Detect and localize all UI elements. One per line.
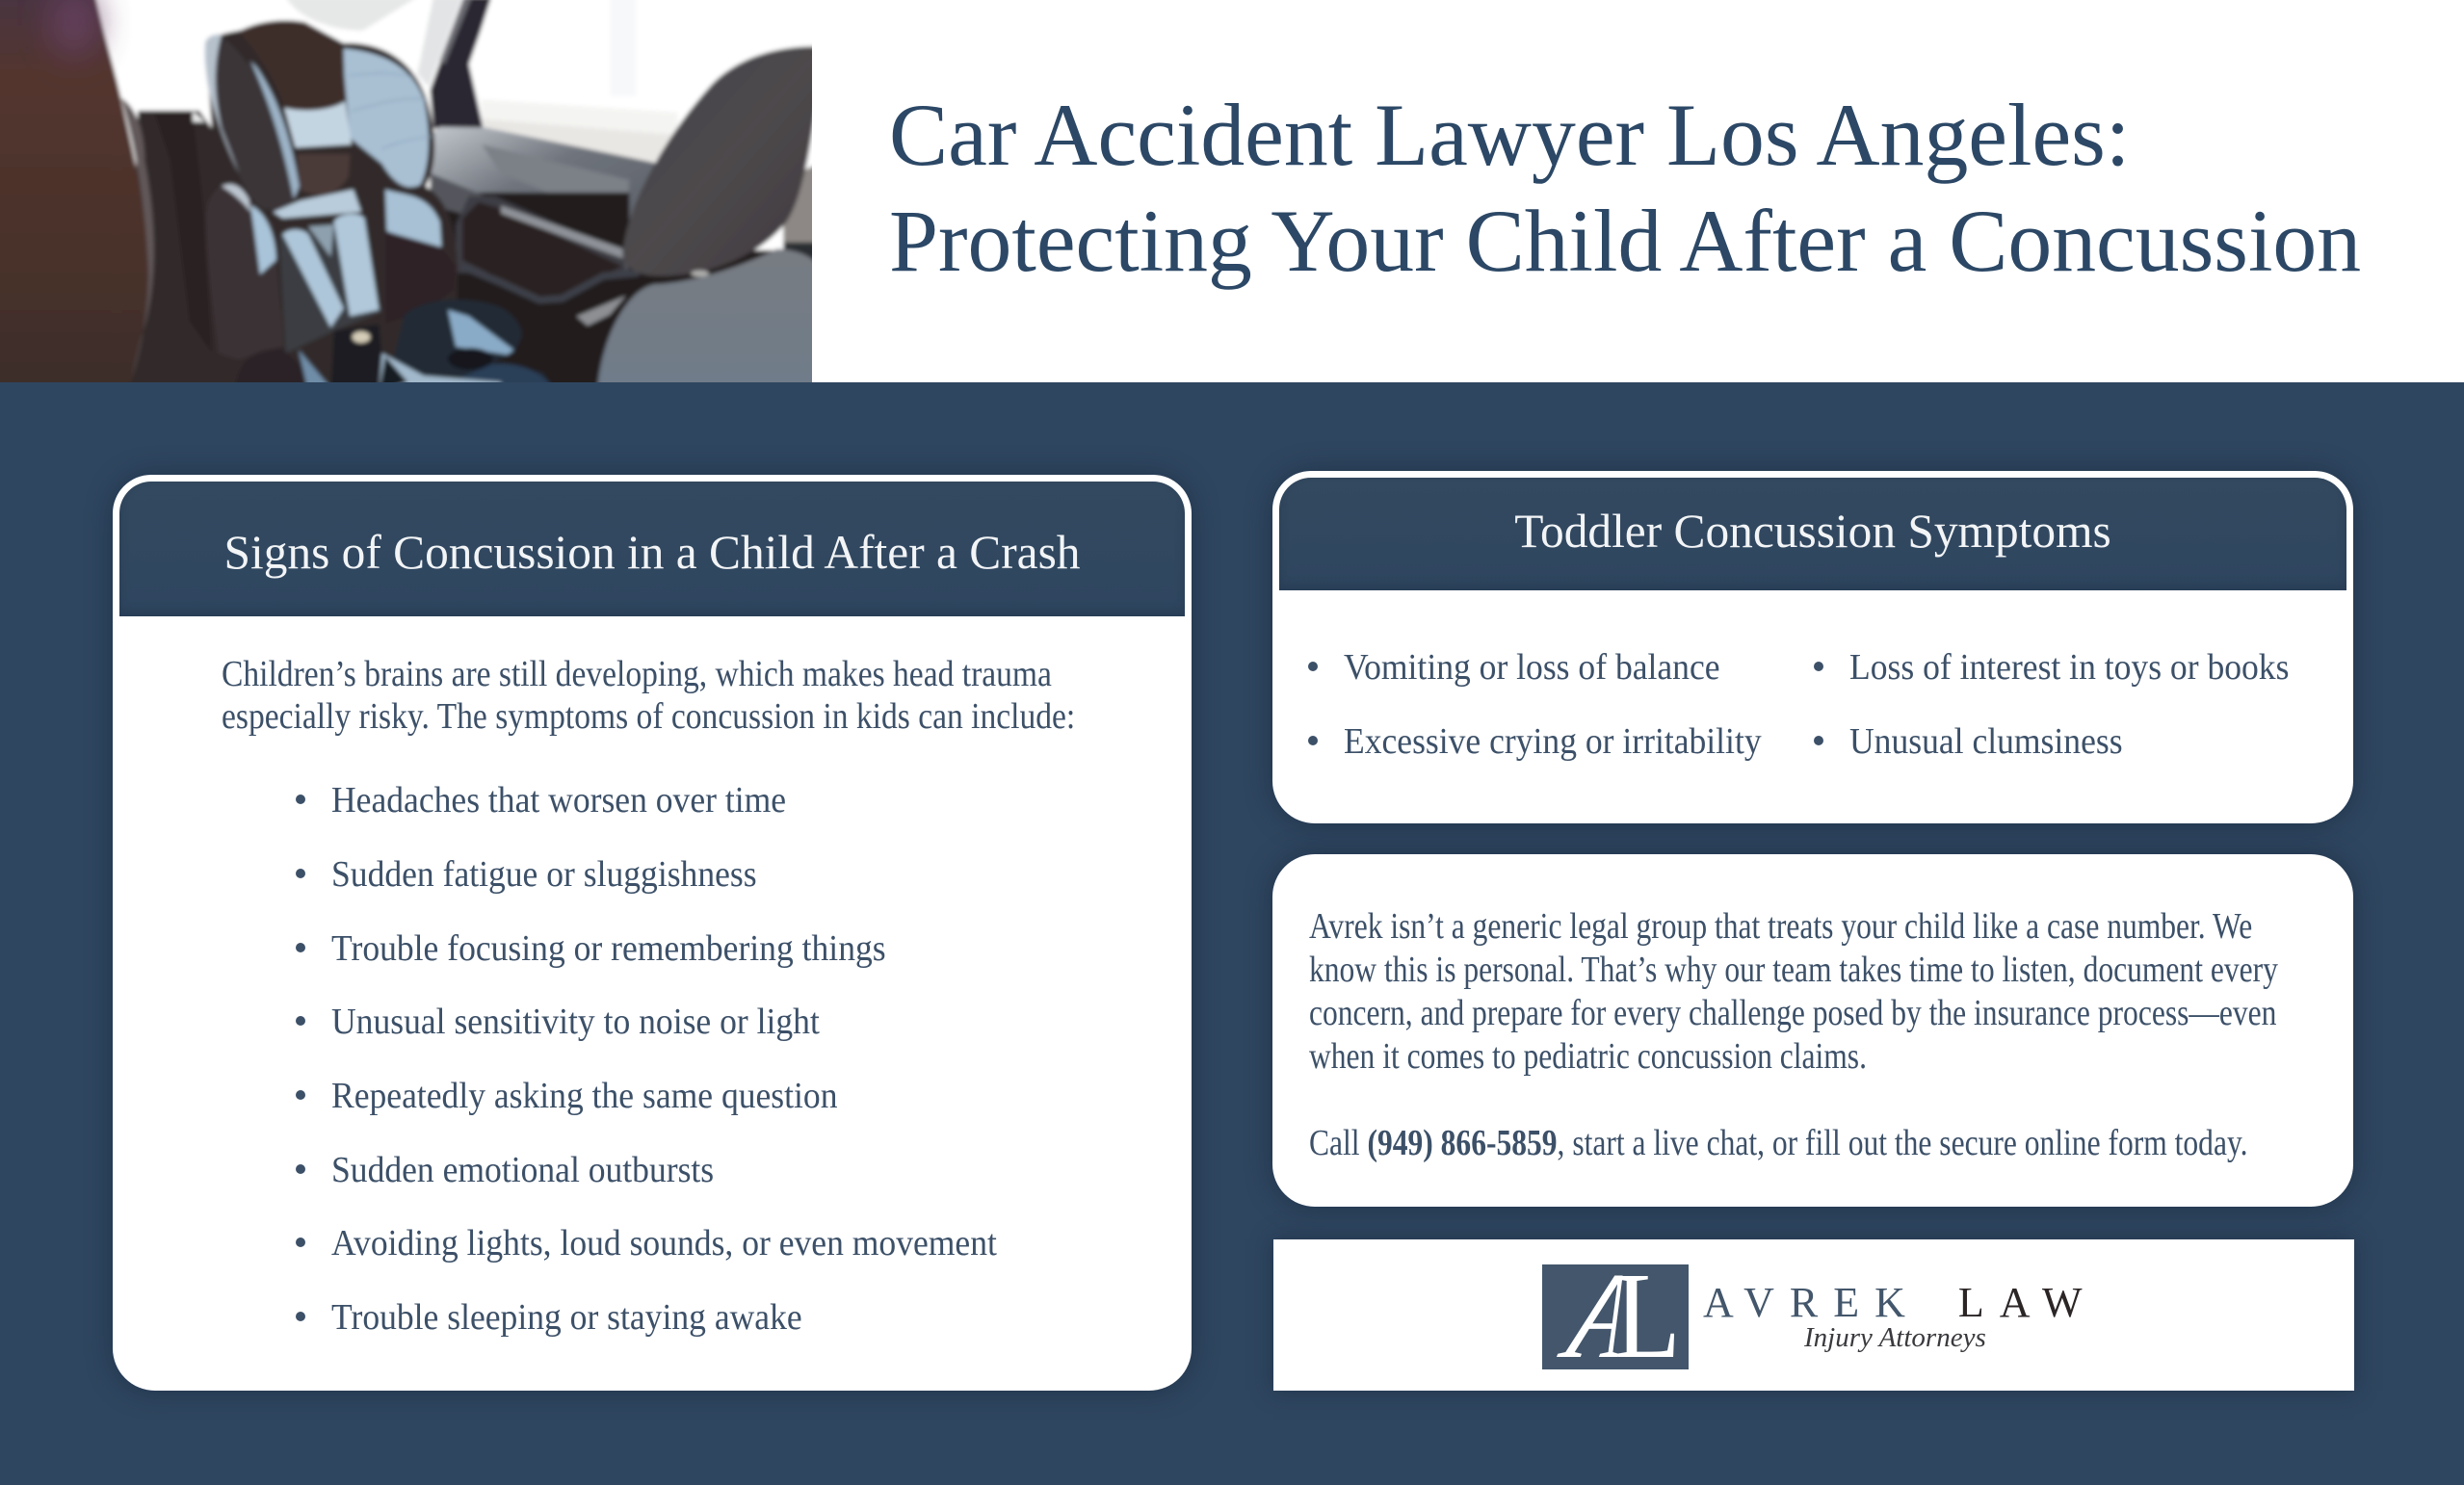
toddler symptom list: Unusual clumsiness — [1849, 721, 2123, 762]
toddler symptom list: Excessive crying or irritability — [1344, 721, 1762, 762]
about text — [1309, 906, 2278, 1077]
symptom list: Headaches that worsen over time — [331, 780, 786, 821]
logo panel — [1273, 1239, 2354, 1391]
about text: when it comes to pediatric concussion claims. — [1309, 1036, 1867, 1077]
intro text — [222, 654, 1075, 737]
logo wordmark: AVREK LAW — [1703, 1279, 2098, 1326]
symptom list — [296, 780, 997, 1338]
symptom list: Unusual sensitivity to noise or light — [331, 1002, 820, 1042]
intro text: Children’s brains are still developing, which makes head trauma — [222, 654, 1052, 694]
toddler symptom list — [1308, 647, 2289, 762]
panel heading: toddler symptoms: Toddler Concussion Symptoms — [1514, 505, 2111, 558]
about text: concern, and prepare for every challenge posed by the insurance process—even — [1309, 993, 2276, 1033]
photo: child car seat — [0, 0, 812, 382]
panel heading: signs of concussion — [113, 475, 1192, 616]
symptom list: Trouble sleeping or staying awake — [331, 1297, 802, 1338]
intro text: especially risky. The symptoms of concussion in kids can include: — [222, 696, 1075, 737]
header band — [0, 0, 2464, 382]
call to action: Call (949) 866-5859, start a live chat, or fill out the secure online form today. — [1309, 1123, 2248, 1163]
panel heading: toddler symptoms — [1272, 471, 2353, 590]
toddler symptom list: Loss of interest in toys or books — [1849, 647, 2289, 688]
about text: know this is personal. That’s why our team takes time to listen, document every — [1309, 950, 2278, 990]
symptom list: Sudden fatigue or sluggishness — [331, 854, 757, 895]
symptom list: Repeatedly asking the same question — [331, 1076, 837, 1116]
symptom list: Avoiding lights, loud sounds, or even movement — [331, 1223, 997, 1264]
title — [889, 86, 2361, 290]
panel: toddler symptoms — [1272, 471, 2353, 823]
about text: Avrek isn’t a generic legal group that treats your child like a case number. We — [1309, 906, 2252, 947]
panel heading: signs of concussion: Signs of Concussion in a Child After a Crash — [223, 526, 1080, 579]
symptom list: Sudden emotional outbursts — [331, 1150, 714, 1190]
symptom list: Trouble focusing or remembering things — [331, 928, 886, 969]
logo tagline: Injury Attorneys — [1804, 1322, 1986, 1353]
toddler symptom list: Vomiting or loss of balance — [1344, 647, 1720, 688]
title: Protecting Your Child After a Concussion — [889, 192, 2361, 290]
title: Car Accident Lawyer Los Angeles: — [889, 86, 2130, 184]
panel: about Avrek and call to action — [1272, 854, 2353, 1207]
panel: signs of concussion — [113, 475, 1192, 1391]
